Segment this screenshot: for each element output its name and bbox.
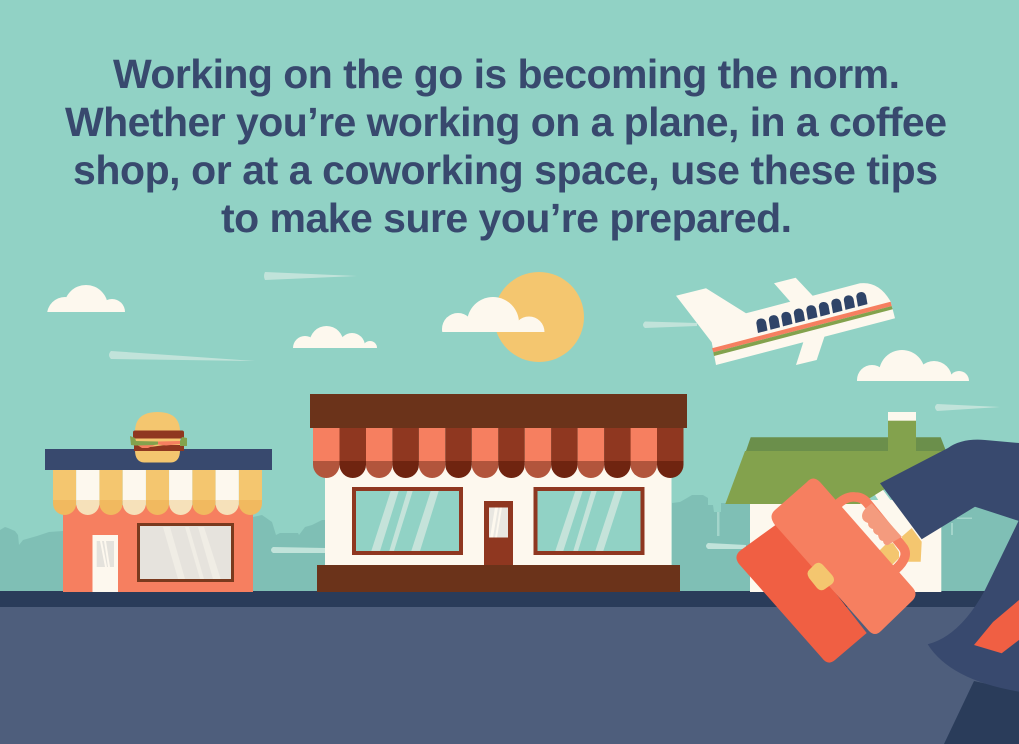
shirt cuff (875, 490, 912, 537)
city skyline (0, 495, 1019, 592)
cloud: right (857, 350, 969, 381)
coat lining (974, 600, 1019, 653)
title (65, 51, 947, 241)
sun (494, 272, 584, 362)
wind streaks (109, 272, 1000, 553)
title: Working on the go is becoming the norm. (113, 51, 900, 97)
briefcase handle (835, 497, 905, 570)
red striped awning (313, 428, 684, 478)
door (484, 501, 513, 567)
commuter carrying briefcase (736, 440, 1019, 744)
suit arm (880, 440, 1019, 539)
burger shop (45, 412, 272, 592)
yellow sleeve (902, 528, 922, 562)
title: to make sure you’re prepared. (221, 195, 792, 241)
road (0, 591, 1019, 744)
title: Whether you’re working on a plane, in a coffee (65, 99, 947, 145)
brown roof (310, 394, 687, 428)
centre shop (310, 394, 687, 592)
coat (928, 520, 1019, 692)
trouser leg (944, 681, 1019, 744)
skyline spires (717, 512, 972, 536)
brown base (317, 565, 680, 592)
icon: burger sign (130, 412, 187, 462)
house (725, 412, 985, 592)
cloud: far left (47, 285, 125, 312)
title: shop, or at a coworking space, use these tips (73, 147, 938, 193)
cloud: over sun (442, 297, 544, 332)
cloud: centre left (293, 326, 377, 348)
shop door (92, 535, 118, 592)
airplane (676, 278, 895, 365)
left window (352, 487, 463, 555)
shop window (137, 523, 234, 582)
yellow fingertips (878, 543, 899, 566)
briefcase (736, 478, 916, 663)
hand (862, 503, 902, 545)
right window (534, 487, 644, 555)
yellow striped awning (53, 470, 262, 515)
